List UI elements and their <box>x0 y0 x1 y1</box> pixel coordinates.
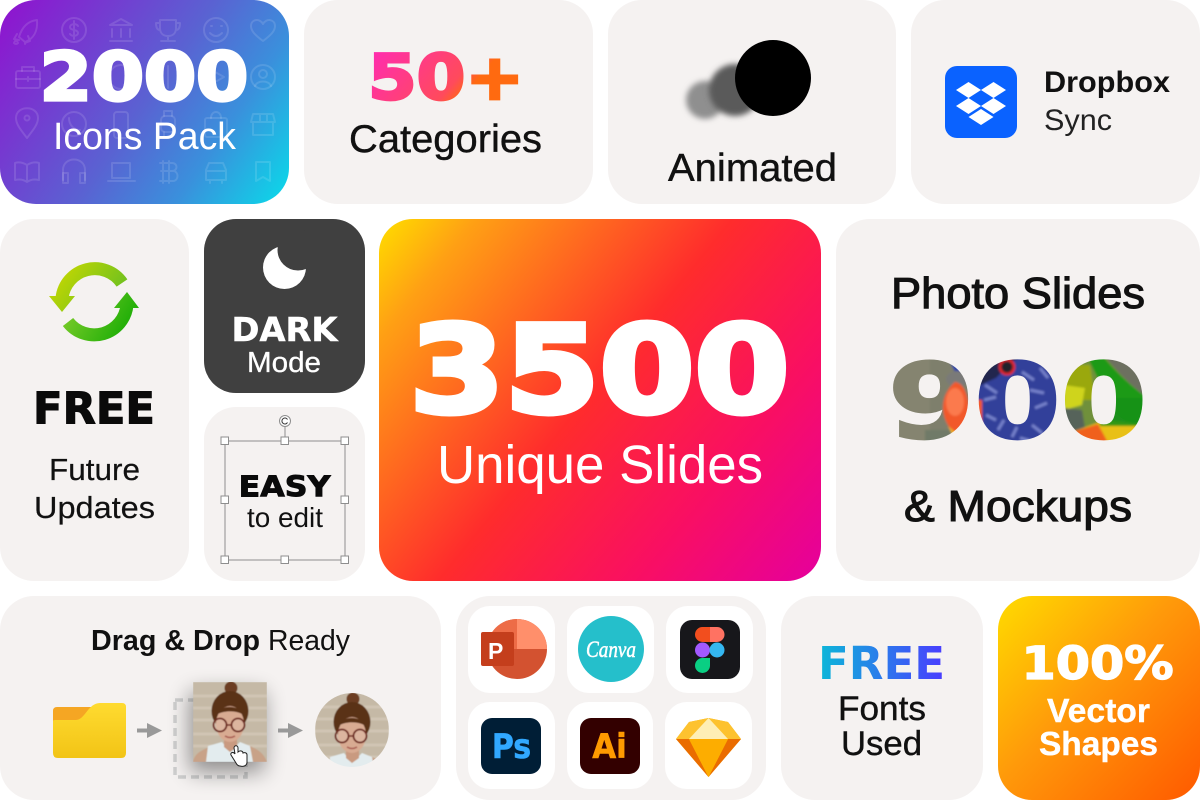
dashed drop target <box>175 700 246 777</box>
icon: moon <box>263 230 318 289</box>
heading: photo slides: Photo Slides <box>891 270 1145 318</box>
big number 2000: 2000 <box>40 38 248 116</box>
label: animated: Animated <box>668 147 837 190</box>
icon: dropbox <box>945 66 1017 138</box>
icon: sketch diamond <box>665 702 752 789</box>
label: updates: Updates <box>34 490 155 525</box>
panel: easy to edit <box>204 407 365 581</box>
icon: illustrator: Ai <box>592 727 627 766</box>
panel: animated <box>608 0 896 204</box>
label: mode: Mode <box>247 347 321 379</box>
big number 3500: 3500 <box>410 300 789 441</box>
icon: powerpoint: P <box>488 638 503 664</box>
arrow: photo to avatar <box>278 723 303 738</box>
icon: photoshop: Ps <box>492 726 531 766</box>
heading: ready: Ready <box>268 625 351 657</box>
background icon pattern <box>14 18 275 183</box>
label: vector: Vector <box>1047 693 1150 730</box>
label: categories: Categories <box>349 118 542 161</box>
panel: 2000 icons pack <box>0 0 289 204</box>
panel: free future updates <box>0 219 189 581</box>
label: easy: EASY <box>239 471 331 504</box>
panel: photo slides and mockups <box>836 219 1200 581</box>
label: to edit: to edit <box>247 502 323 533</box>
label: unique slides: Unique Slides <box>437 435 763 495</box>
icon: photoshop <box>468 702 555 789</box>
heading: drag and drop: Drag & Drop <box>91 625 260 657</box>
number 100%: 100% <box>1021 638 1174 690</box>
label: sync: Sync <box>1044 104 1112 137</box>
label: icons pack: Icons Pack <box>53 116 237 158</box>
icon: hand cursor <box>231 746 247 766</box>
panel: 3500 unique slides <box>379 219 821 581</box>
number 50+: 50+ <box>368 41 524 114</box>
panel: dropbox sync <box>911 0 1200 204</box>
heading: free: FREE <box>818 637 945 690</box>
icon: illustrator <box>567 702 653 789</box>
icon: moving black circle with motion trail <box>686 40 811 119</box>
icon: canva: Canva <box>586 637 636 662</box>
label: used: Used <box>841 725 922 763</box>
photo being dragged <box>190 682 267 772</box>
arrow: folder to photo <box>137 723 162 738</box>
round avatar <box>315 692 389 773</box>
icon: canva <box>567 606 654 693</box>
icon: figma <box>666 606 753 693</box>
panel: dark mode <box>204 219 365 393</box>
panel: free fonts used <box>781 596 983 800</box>
label: and mockups: & Mockups <box>904 483 1132 531</box>
panel: 100 percent vector shapes <box>998 596 1200 800</box>
label: dark: DARK <box>232 310 339 349</box>
label: shapes: Shapes <box>1039 726 1158 763</box>
icon: folder <box>53 703 126 758</box>
label: future: Future <box>49 452 140 487</box>
icon: powerpoint <box>468 606 555 693</box>
icon: selection frame with handles <box>221 416 348 564</box>
panel: app compatibility <box>456 596 766 800</box>
panel: drag and drop ready <box>0 596 441 800</box>
label: fonts: Fonts <box>838 690 926 728</box>
number 900 filled with bird photo: 900 <box>888 341 1147 462</box>
panel: categories <box>304 0 593 204</box>
heading: free: FREE <box>33 384 155 435</box>
icon: green refresh arrows <box>49 269 139 335</box>
label: dropbox: Dropbox <box>1044 66 1170 99</box>
